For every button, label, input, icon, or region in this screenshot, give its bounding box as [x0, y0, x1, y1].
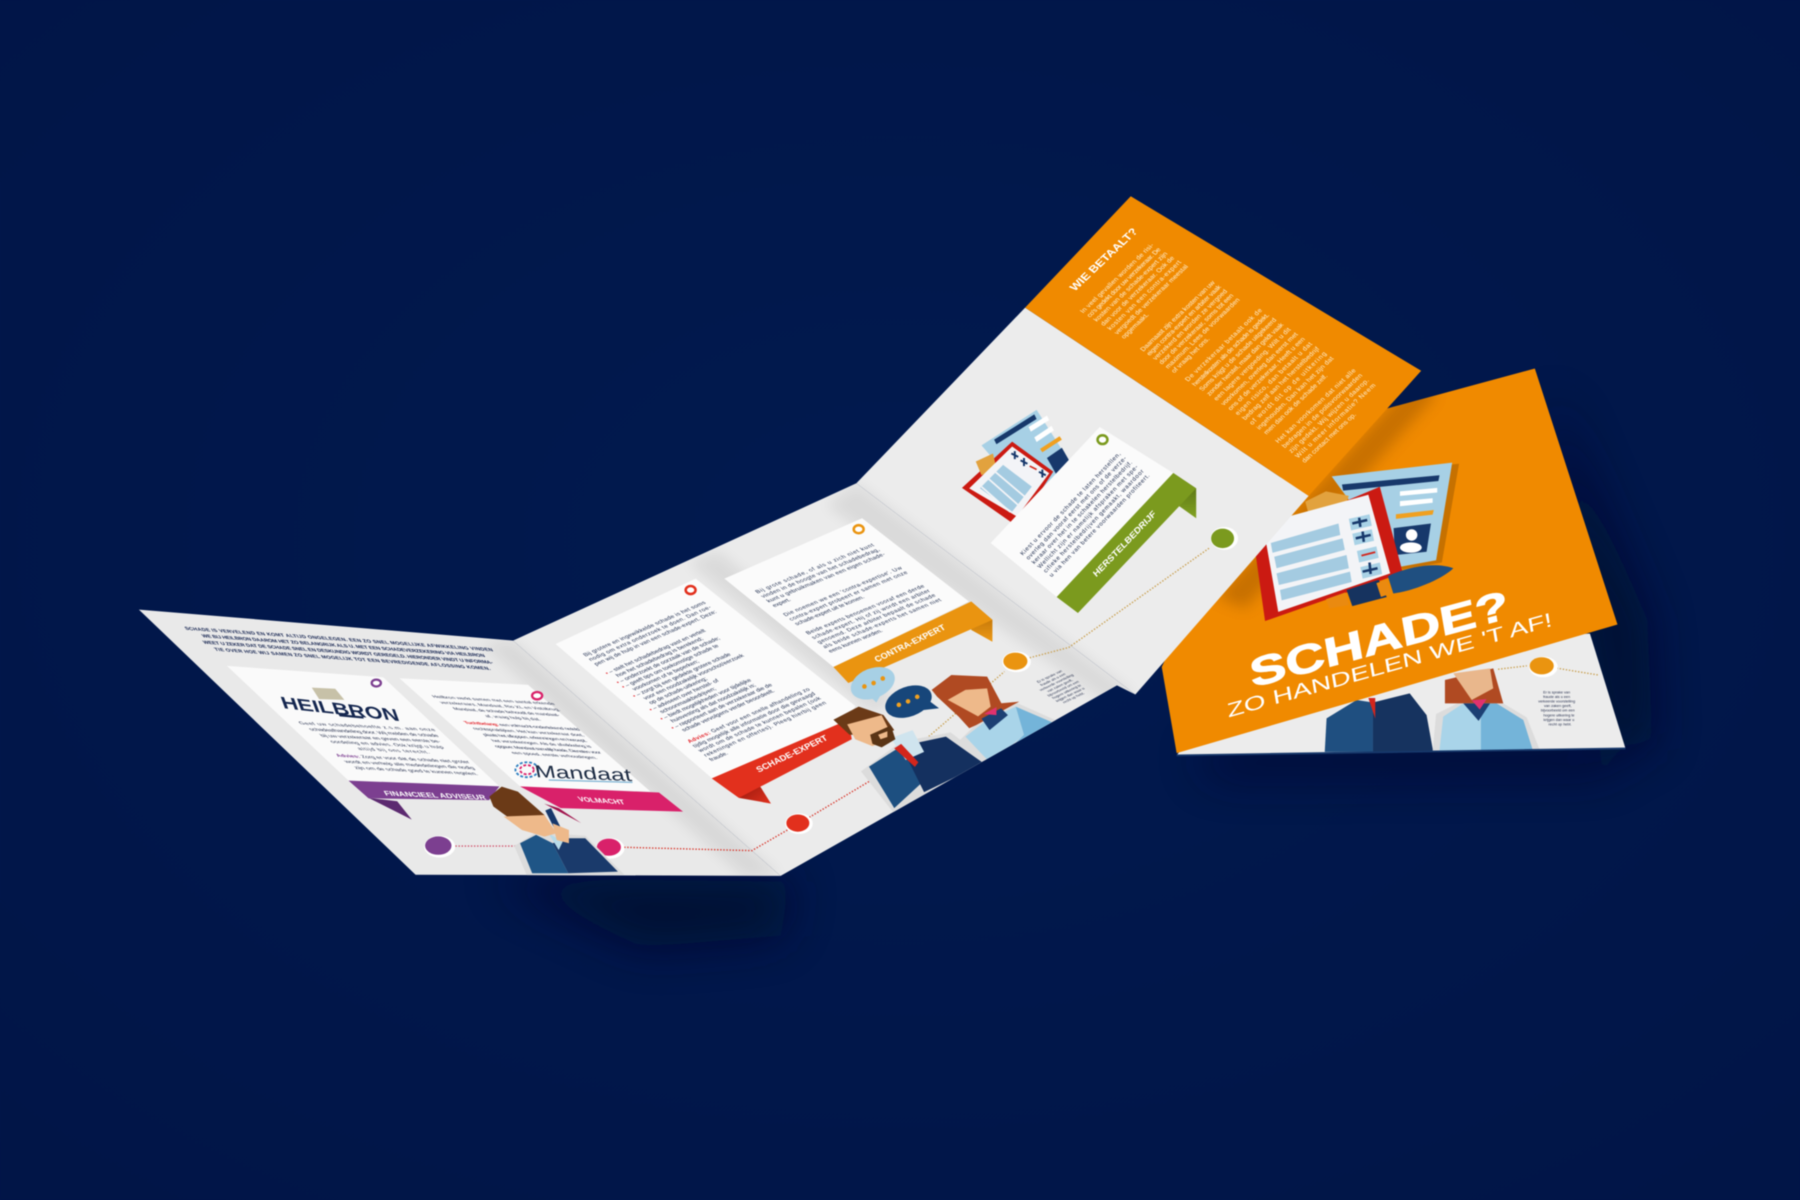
body text: Bij grote schade, of als u zich niet kunt — [755, 543, 876, 595]
body text: hoe het schadebedrag is berekend; — [615, 637, 706, 678]
body text: als beide schade-experts het samen niet — [822, 598, 944, 650]
body text: voorkomen of te beperken; — [631, 659, 701, 692]
body text — [431, 695, 618, 761]
ribbon: financieel adviseur — [349, 781, 499, 820]
open brochure — [139, 196, 1421, 878]
body text: Tuchtbelang: een volmacht-ondertekend neteld — [463, 721, 582, 732]
ribbon: schade-expert: SCHADE-EXPERT — [754, 733, 830, 774]
ribbon: volmacht: VOLMACHT — [576, 795, 627, 806]
body text: Beide experts benoemen vooraf een derde — [805, 584, 927, 636]
fold shading — [482, 483, 1135, 878]
body text: u via hen van betere voorwaarden profiteert. — [1049, 473, 1152, 579]
body text: een spoed, eerste verhoudingen. — [510, 751, 600, 760]
body text: wordt om de schade te kunnen bepalen (ook — [697, 696, 823, 754]
body text: • – onderzoekt de oorzaak van de schade; — [615, 636, 722, 685]
body text: • – stelt het schadebedrag vast en vertelt — [604, 629, 708, 676]
intro heading text: WEET U ZEKER DAT DE SCHADE SNEL EN DESKUNDIG WORDT GEREGELD. HIERONDER VINDT U INFORMA- — [202, 640, 495, 666]
fraud note: fraude als u een — [1543, 695, 1570, 699]
heading: wie betaalt: WIE BETAALT? — [1068, 226, 1141, 293]
cover illustration — [1254, 463, 1459, 621]
ribbon: volmacht — [520, 786, 683, 823]
orange text paragraph 2: Daarnaast zijn extra kosten van uw — [1139, 280, 1217, 353]
ring marker red — [686, 586, 696, 594]
orange text paragraph 1: co's gedekt door uw verzekeraar. De — [1086, 247, 1163, 319]
logo HEILBRON — [278, 688, 402, 725]
body text: tijdig mogelijk alle informatie door die gevraagd — [692, 692, 817, 749]
ribbon: financieel adviseur: FINANCIEEL ADVISEUR — [382, 790, 488, 801]
fraud note on middle panel: Er is sprake van — [1036, 669, 1063, 684]
clipboard — [1254, 487, 1403, 621]
orange text paragraph 4: Wilt u meer informatie? Neem — [1294, 382, 1378, 459]
orange text paragraph 3 — [1184, 307, 1343, 436]
inside sheet under cover — [1177, 634, 1626, 755]
ring marker green — [1098, 435, 1107, 444]
body text: zijn om de schade goed te kunnen regelen. — [352, 766, 480, 777]
orange text paragraph 1: kosten van een contra-expert — [1106, 260, 1183, 331]
orange text paragraph 3: ingehouden. Dan kan het zijn dat — [1255, 356, 1336, 431]
body text: • – rapporteert aan de verzekeraar die de — [670, 683, 775, 731]
orange text paragraph 2: verzekerd en worden ze vergoed — [1152, 288, 1230, 362]
body text: oordeling en advies. Ook krijgt u hulp — [328, 740, 447, 750]
body text: Kiest u ervoor de schade te laten herstellen, — [1020, 451, 1123, 557]
body text — [1020, 451, 1152, 579]
orange text paragraph 4 — [1274, 367, 1385, 464]
body text: rekeningen en offertes). Pleeg hierbij geen — [703, 701, 828, 758]
body text: • – biedt mogelijkheden voor tijdelijke — [659, 678, 754, 722]
dot: orange — [1002, 651, 1031, 672]
orange text paragraph 3: of wordt dit op de uitkering — [1248, 351, 1329, 426]
speech bubble dark — [881, 679, 939, 724]
orange text paragraph 3: voorkomen, overleg dan eerst met — [1220, 332, 1300, 407]
person: expert man — [833, 707, 990, 815]
fraud note: recht op hebt. — [1549, 723, 1572, 727]
intro heading text — [184, 627, 508, 673]
orange text paragraph 1: In veel gevallen worden de risi- — [1079, 243, 1156, 314]
logo Mandaat: Mandaat — [533, 762, 633, 785]
body text: vinden in de hoogte van het schadebedrag, — [760, 548, 882, 599]
intro heading text: WE BIJ HEILBRON DAAROM HET ZO BELANGRIJK ALS U. MET EEN SCHADEVERZEKERING VIA HEILBRON — [201, 634, 487, 659]
card: financieel adviseur — [227, 666, 499, 786]
body text: kunt u gebruikmaken van een eigen schade- — [766, 552, 887, 604]
body text — [581, 600, 834, 763]
fraud note on middle panel: verkeerde voorstelling — [1038, 673, 1075, 692]
person: expert woman — [931, 674, 1054, 759]
ring marker pink — [532, 692, 542, 699]
fraud note on middle panel: bijvoorbeeld om een — [1047, 680, 1080, 697]
fraud note on middle panel: hogere uitkering te — [1051, 684, 1082, 700]
body text: • – adviseert over herstel- of — [648, 679, 721, 713]
body text: verzekeraars, Mandaat, Rio XL en Vistabrug. — [439, 701, 563, 712]
orange text paragraph 1: opgemaakt. — [1120, 312, 1151, 340]
body text: af, vraag hulp bij dat. — [484, 715, 544, 722]
orange text paragraph 3: ons of de verzekeraar. Heeft u een — [1227, 336, 1307, 412]
body text: Heilbron werkt samen met een aantal erkende — [431, 695, 557, 706]
orange text paragraph 4: Het kan voorkomen dat niet alle — [1274, 368, 1358, 445]
body text: wordt en verhelp alle mededelingen die nodig — [342, 759, 477, 771]
dot: pink — [596, 838, 624, 859]
orange text paragraph 3: herstelkosten als de schade is gedekt. — [1191, 312, 1271, 388]
body text: Mandaat, de schade behoudt de mandaat- — [452, 707, 562, 718]
ribbon: contra-expert — [833, 602, 992, 683]
ring marker purple — [372, 680, 381, 686]
fraud note on middle panel: krijgen dan waar u — [1055, 687, 1086, 703]
body text: genoemd. Deze arbiter bepaalt de schade — [816, 593, 938, 645]
body text: contra-expert probeert er samen met onze — [788, 570, 910, 622]
body text: • – zorgt bij een gedekte grotere schade — [632, 652, 734, 699]
body text: cifieke herstelbedrijven gemaakt, waardoor — [1043, 469, 1146, 574]
logo Mandaat — [515, 762, 633, 785]
orange text paragraph 4: zijn gedekt. Wij wijzen u daarop. — [1287, 378, 1371, 454]
body text: nodig om extra onderzoek te doen. Dan roe- — [588, 605, 713, 662]
fraud note: krijgen dan waar u — [1544, 718, 1574, 722]
orange text paragraph 2: door de verzekeraar, soms tot een — [1158, 293, 1236, 366]
panel: middle — [513, 483, 1135, 876]
body text — [755, 543, 950, 654]
orange text paragraph 3: zonder herstel, maar dan geldt vaak — [1205, 322, 1286, 397]
fraud note on middle panel: fraude als u een — [1039, 673, 1067, 687]
orange text paragraph 4: bedragen in de polisvoorwaarden — [1281, 373, 1365, 450]
dotted timeline and orange dot — [1498, 657, 1598, 677]
panel: right — [856, 308, 1309, 695]
card: volmacht — [399, 678, 651, 792]
body text: eens kunnen worden. — [827, 629, 885, 654]
fraud note: bijvoorbeeld om een — [1541, 709, 1575, 713]
body text: schadeafhandeling door. Wij melden de schade — [307, 727, 441, 738]
fraud note on middle panel: recht op hebt. — [1062, 692, 1086, 704]
orange text paragraph 3: een lagere vergoeding. Wilt u dit — [1213, 327, 1293, 402]
man on inside sheet — [1325, 693, 1433, 752]
body text: Bij grotere en ingewikkelde schade is het soms — [582, 601, 708, 658]
dotted timeline left — [452, 548, 1210, 851]
body text: voor een noodzakelijk voorschot/eerzoek — [642, 654, 746, 701]
orange text paragraph 2: eigen contra-expert en arbiter vaak — [1145, 284, 1224, 357]
ring marker orange — [854, 525, 864, 533]
body text: overleg dan vooraf eerst met ons of de verze- — [1025, 456, 1128, 561]
logo HEILBRON: HEILBRON — [278, 693, 402, 725]
fraud note: van zaken geeft, — [1544, 704, 1572, 708]
orange text paragraph 2 — [1139, 279, 1248, 374]
fraud note: hogere uitkering te — [1543, 713, 1575, 717]
body text: • – geeft tips om toekomstige schade te — [621, 644, 721, 690]
dot: green — [1211, 527, 1238, 550]
body text: opgave: Mandaat samelijk beide. Diensten voor — [493, 745, 603, 755]
cover subtitle: ZO HANDELEN WE 'T AF! — [1225, 609, 1554, 722]
card: contra-expert — [724, 518, 969, 667]
body text: expert. — [771, 598, 793, 608]
body text — [297, 721, 487, 777]
body text: pen wij de hulp in van een schade-expert. Deze: — [593, 610, 719, 667]
illustration: clipboard on right panel — [962, 410, 1080, 527]
document — [1332, 463, 1459, 569]
orange text paragraph 3: eigen risico, dan betaalt u dat — [1234, 341, 1314, 417]
woman on inside sheet — [1433, 668, 1541, 752]
body text: Advies: Zorg er voor dat de schade niet groter — [334, 753, 473, 765]
body text: Wellicht zijn er namelijk afspraken met spe- — [1037, 465, 1140, 570]
body text: schade-expert uit te komen. — [794, 595, 867, 627]
fraud note — [1538, 690, 1575, 727]
body text: op de schade-uitkering; — [648, 677, 710, 706]
fraud note: Er is sprake van — [1543, 690, 1570, 694]
panel: left — [139, 610, 781, 876]
orange text paragraph 2: of vraag het ons. — [1170, 336, 1212, 374]
body text: altijd bij ons terecht. — [356, 747, 432, 755]
ribbon: herstelbedrijf: HERSTELBEDRIJF — [1091, 509, 1158, 579]
orange text paragraph 1: vergoedt de verzekeraar meestal — [1113, 264, 1191, 336]
orange text paragraph 3: De verzekeraar betaalt ook de — [1184, 307, 1264, 383]
orange text paragraph 3: Soms krijgt u de schade uitgekeerd — [1198, 317, 1279, 392]
orange cover — [1162, 368, 1617, 753]
panel: orange flap — [1025, 196, 1421, 496]
fraud note on middle panel: van zaken geeft, — [1046, 678, 1074, 693]
fraud note: verkeerde voorstelling — [1538, 700, 1575, 704]
orange text paragraph 3: men dan ook de schade zelf. — [1263, 373, 1330, 436]
intro heading text: SCHADE IS VERVELEND EN KOMT ALTIJD ONGELEGEN. EEN ZO SNEL MOGELIJKE AFWIKKELING VINDEN — [184, 627, 495, 653]
body text: plaats het afloppen, erkenningen en heroept. — [482, 733, 590, 743]
body text: huisvesting als dat noodzakelijk is; — [670, 683, 758, 724]
body text: fraude. — [708, 751, 730, 763]
orange text paragraph 1 — [1079, 242, 1197, 340]
dot: purple — [424, 836, 455, 858]
body text: Geef uw schadebehoefte z.s.m. aan onze — [297, 721, 438, 733]
body text: schade vervolgens verder beoordeelt. — [681, 689, 777, 733]
body text: Die noemen we een 'contra-expertise'. Uw — [783, 566, 905, 618]
body text: keraar over het in te schakelen herstelbedrijf. — [1031, 460, 1134, 565]
body text: rechtspraktijken. Het kan verzekeraar doet, — [472, 727, 587, 738]
drop shadows — [494, 390, 1653, 947]
dot: red — [785, 813, 813, 834]
card: herstelbedrijf — [991, 427, 1173, 597]
fraud note on middle panel — [1032, 667, 1092, 707]
card: schade-expert — [556, 579, 855, 778]
ribbon: contra-expert: CONTRA-EXPERT — [872, 622, 948, 664]
orange text paragraph 1: dan voor de verzekeraar. Ook de — [1099, 255, 1177, 327]
body text: bij uw verzekeraar en geven een eerste be- — [318, 733, 443, 744]
flap shadow on cover — [1217, 371, 1435, 608]
cover title: SCHADE? — [1246, 582, 1512, 696]
orange text paragraph 3: bedrag zelf aan het herstelbedrijf — [1241, 346, 1321, 421]
orange text paragraph 2: maximum. Lees de voorwaarden — [1164, 297, 1242, 370]
body text: het verzekeringen. Als de afwikkeling is — [490, 739, 594, 749]
ribbon: herstelbedrijf — [1057, 473, 1196, 613]
orange text paragraph 1: kosten van de schade-expert zijn — [1093, 251, 1170, 323]
body text: schade-expert. Hij of zij wordt een arbiter — [811, 589, 932, 640]
back brochure — [1162, 368, 1626, 755]
pen — [1326, 565, 1453, 608]
person: woman on phone — [489, 787, 624, 878]
orange text paragraph 4: dan contact met ons op. — [1301, 412, 1358, 464]
ribbon: schade-expert — [712, 720, 852, 804]
speech bubble light — [846, 661, 900, 706]
body text: schoonmaakbedrijven; — [659, 687, 718, 715]
body text: Advies: Geef voor een snelle afhandeling zo — [687, 687, 813, 744]
intro heading text: TIE OVER HOE WIJ SAMEN ZO SNEL MOGELIJK TOT EEN BEVREDIGENDE AFLOSSING KOMEN. — [213, 648, 493, 672]
